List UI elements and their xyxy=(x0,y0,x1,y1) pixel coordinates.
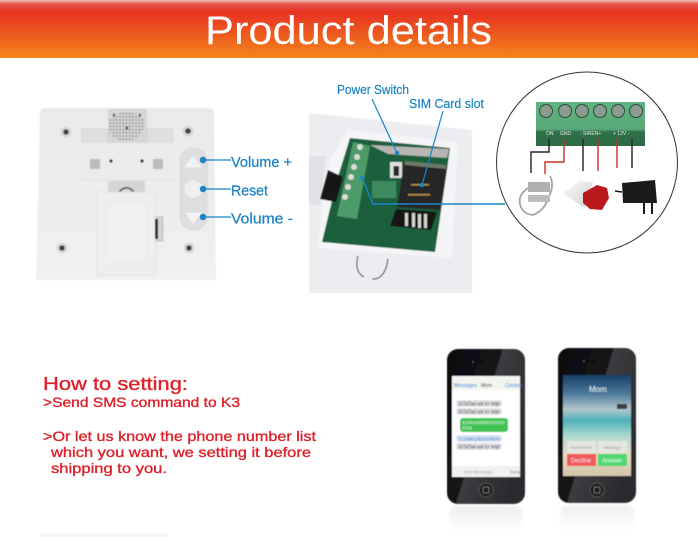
button strip xyxy=(180,148,207,230)
SMS screen: SOS/Dad ask for help! xyxy=(458,402,500,408)
callouts: power switch and SIM slot xyxy=(337,83,505,204)
SMS screen: Text Message xyxy=(463,470,493,476)
SMS screen: Send xyxy=(510,470,522,476)
mounting bracket xyxy=(81,129,174,180)
power adapter xyxy=(615,180,657,214)
hook loop xyxy=(108,181,145,201)
device back view photo xyxy=(36,108,216,280)
screw holes xyxy=(57,126,194,253)
SMS screen: SOS/Dad ask for help! xyxy=(458,444,500,450)
callouts: volume and reset xyxy=(200,155,293,228)
label: volume up: Volume + xyxy=(231,155,292,171)
terminal block: ON xyxy=(546,131,554,137)
instruction: SMS: >Send SMS command to K3 xyxy=(43,394,240,410)
SMS screen: T1:008613510150870 xyxy=(458,436,500,442)
magnetic door sensor xyxy=(520,176,552,215)
setup instructions xyxy=(43,374,316,476)
SMS screen: Contact xyxy=(505,383,523,389)
instruction: phone list: >Or let us know the phone number list xyxy=(43,428,316,444)
speaker grille xyxy=(108,109,147,142)
circuit board xyxy=(322,138,450,252)
wiring diagram circle xyxy=(496,72,678,253)
call screen: Decline xyxy=(571,458,592,464)
call screen: Mom xyxy=(589,385,607,394)
terminal block: + 12V - xyxy=(613,131,630,137)
phone reflections xyxy=(449,505,634,532)
black connector xyxy=(320,170,343,202)
green terminal block xyxy=(337,142,370,219)
instruction: phone list: shipping to you. xyxy=(51,460,167,476)
siren xyxy=(563,181,609,210)
call screen: Message xyxy=(604,445,622,450)
label: SIM card slot: SIM Card slot xyxy=(409,97,485,111)
open device photo with circuit board xyxy=(309,113,472,293)
SMS screen: 6734 xyxy=(462,426,473,430)
faint footer text remnant xyxy=(40,533,168,537)
instructions heading: How to setting: xyxy=(43,374,188,394)
call screen: Answer xyxy=(602,458,622,464)
label: reset: Reset xyxy=(231,184,268,200)
label: volume down: Volume - xyxy=(231,212,293,228)
battery cover xyxy=(97,192,163,275)
terminal block xyxy=(536,102,645,146)
SMS screen: SOS/Dad ask for help! xyxy=(458,410,500,416)
phone: incoming call xyxy=(558,348,636,503)
SMS screen: Mom xyxy=(481,383,492,389)
call screen: Remind Me xyxy=(571,445,593,450)
instruction: phone list xyxy=(43,428,316,476)
terminal block: - SIREN+ xyxy=(580,131,601,137)
SMS screen: 12341426860101010 xyxy=(462,420,505,425)
instruction: phone list: which you want, we setting it before xyxy=(50,444,311,460)
title: Product details xyxy=(205,9,492,53)
phone: SMS messages xyxy=(447,349,525,504)
header banner xyxy=(0,0,698,58)
SMS screen xyxy=(452,376,523,477)
label: power switch: Power Switch xyxy=(337,83,409,97)
cover clip xyxy=(357,256,388,279)
SIM card slot xyxy=(390,161,447,230)
wires xyxy=(531,139,632,174)
SMS screen: Messages xyxy=(454,383,477,389)
terminal block: GND xyxy=(560,131,572,137)
power switch xyxy=(390,162,402,178)
call screen xyxy=(563,375,631,476)
